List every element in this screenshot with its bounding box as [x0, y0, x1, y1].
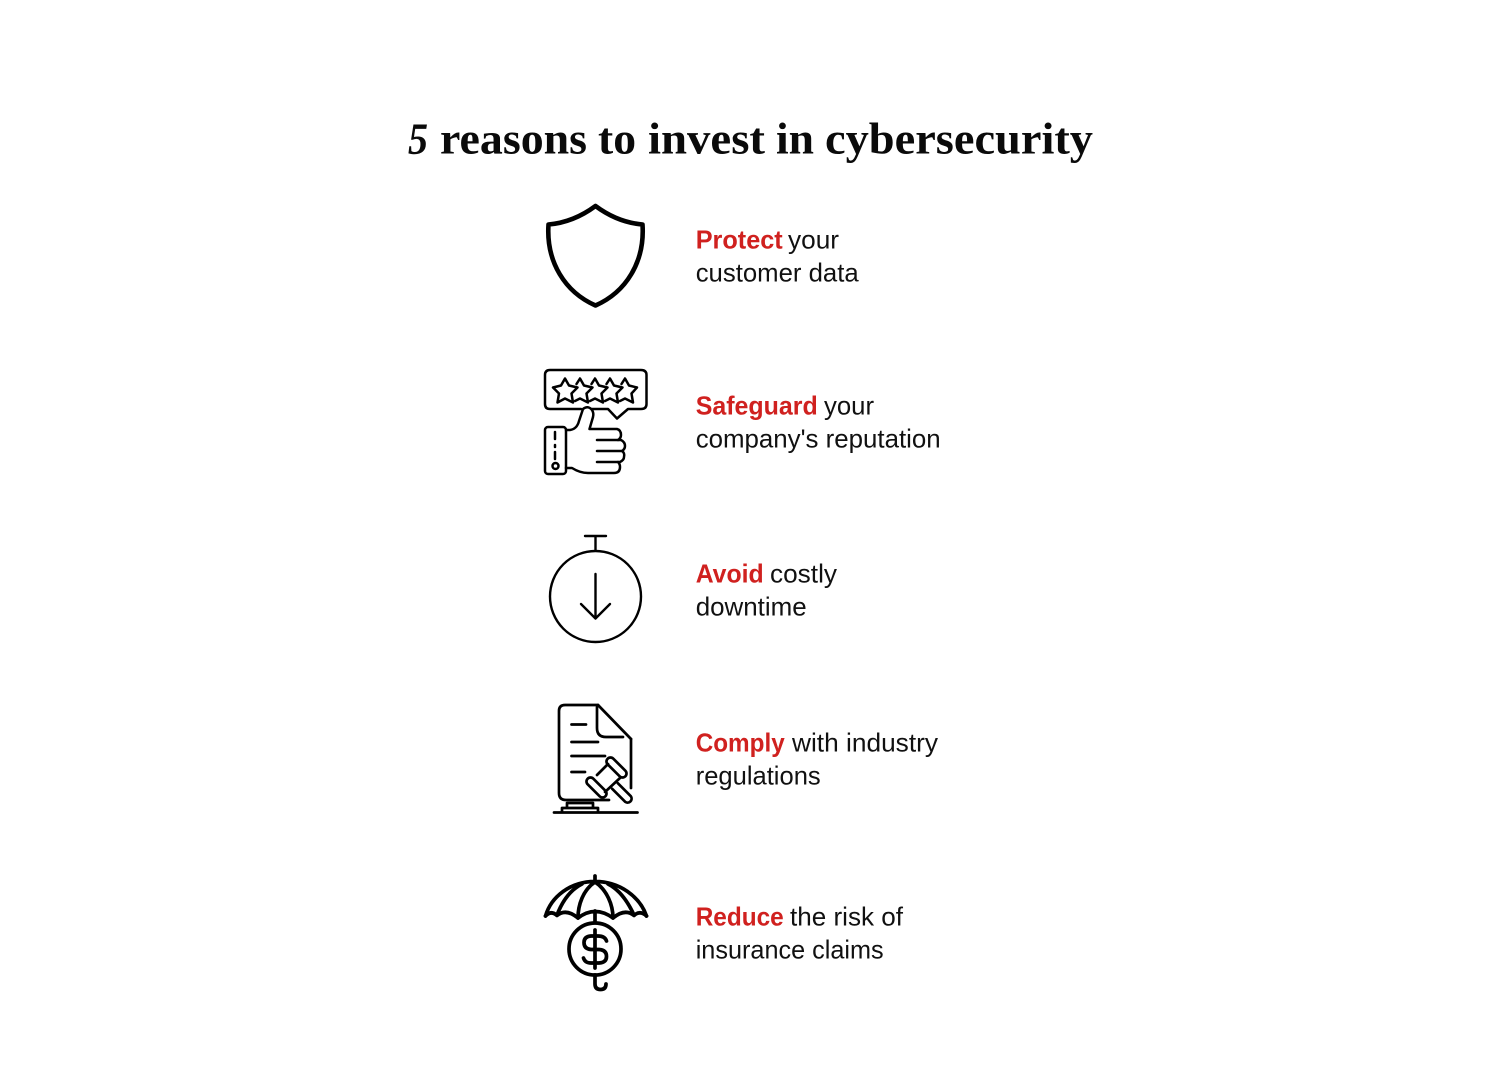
text: reduce the risk of insurance claims: insurance claims — [696, 935, 884, 965]
text: comply with industry regulations: Comply — [696, 728, 785, 758]
icon: umbrella with dollar coin — [546, 876, 646, 990]
text: safeguard your company's reputation: your — [824, 391, 874, 421]
row: safeguard reputation — [545, 370, 941, 474]
title: in — [776, 114, 814, 164]
title — [408, 114, 1093, 164]
text: comply with industry regulations: regulations — [696, 761, 821, 791]
text: protect your customer data: Protect — [696, 225, 783, 255]
text: safeguard your company's reputation: Safeguard — [696, 391, 818, 421]
title: invest — [648, 114, 765, 164]
title: to — [598, 114, 636, 164]
title: 5 — [408, 114, 428, 164]
icon: thumbs up with star rating — [545, 370, 646, 474]
text: comply with industry regulations — [696, 728, 938, 791]
icon: stopwatch with down arrow — [550, 536, 641, 642]
text: avoid costly downtime — [696, 559, 837, 622]
title: reasons — [440, 114, 587, 164]
text: avoid costly downtime: downtime — [696, 592, 807, 622]
icon: shield — [548, 206, 643, 306]
text: safeguard your company's reputation — [696, 391, 941, 454]
text: reduce the risk of insurance claims: Reduce — [696, 902, 784, 932]
text: protect your customer data: your — [788, 225, 839, 255]
icon: document with gavel — [554, 705, 638, 812]
text: avoid costly downtime: costly — [770, 559, 837, 589]
text: safeguard your company's reputation: company's reputation — [696, 424, 941, 454]
row: reduce insurance claims — [546, 876, 904, 990]
text: protect your customer data — [696, 225, 859, 288]
text: reduce the risk of insurance claims — [696, 902, 904, 965]
text: avoid costly downtime: Avoid — [696, 559, 764, 589]
text: protect your customer data: customer data — [696, 258, 859, 288]
text: reduce the risk of insurance claims: the risk of — [790, 902, 904, 932]
row: protect customer data — [548, 206, 859, 306]
row: comply with regulations — [554, 705, 938, 812]
text: comply with industry regulations: with industry — [791, 728, 938, 758]
title: cybersecurity — [825, 114, 1093, 164]
row: avoid downtime — [550, 536, 837, 642]
